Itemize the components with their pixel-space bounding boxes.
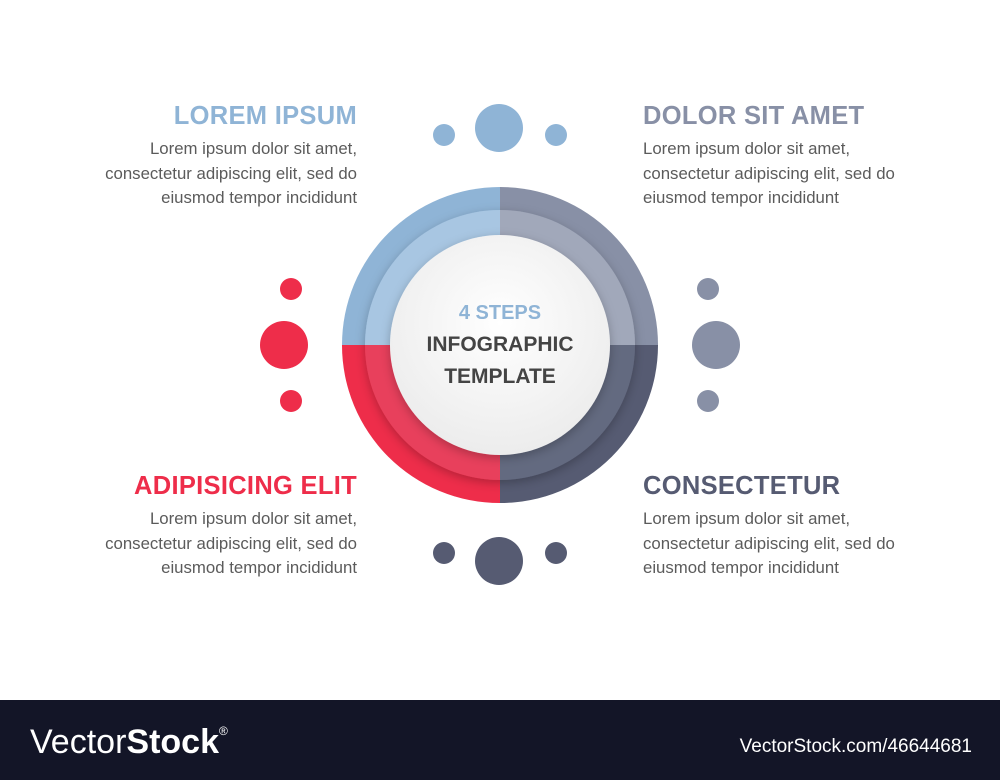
text block: consectetur: eiusmod tempor incididunt <box>643 558 839 577</box>
text block: dolor sit amet: consectetur adipiscing elit, sed do <box>643 164 895 182</box>
footer bar <box>0 700 1000 780</box>
text block: consectetur: Lorem ipsum dolor sit amet, <box>643 509 850 528</box>
text block: adipisicing elit <box>105 472 357 577</box>
text block: lorem ipsum: eiusmod tempor incididunt <box>161 188 357 207</box>
footer bar: VectorStock <box>30 723 219 761</box>
footer bar: VectorStock.com/46644681 <box>740 736 972 757</box>
ring chart <box>342 187 658 503</box>
text block: dolor sit amet: DOLOR SIT AMET <box>643 102 864 130</box>
text block: lorem ipsum: LOREM IPSUM <box>174 102 357 130</box>
center text: 4 STEPS <box>459 302 541 324</box>
footer bar: ® <box>219 724 228 738</box>
text block: adipisicing elit: Lorem ipsum dolor sit amet, <box>150 509 357 528</box>
text block: lorem ipsum <box>105 102 357 207</box>
dots: left <box>260 278 308 412</box>
text block: consectetur: consectetur adipiscing elit, sed do <box>643 534 895 552</box>
text block: consectetur <box>643 472 895 577</box>
text block: lorem ipsum: consectetur adipiscing elit, sed do <box>105 164 357 182</box>
text block: consectetur: CONSECTETUR <box>643 472 840 500</box>
center text <box>426 302 574 388</box>
center text: TEMPLATE <box>444 365 556 388</box>
dots: bottom <box>433 537 567 585</box>
text block: dolor sit amet <box>643 102 895 207</box>
center text: INFOGRAPHIC <box>426 333 574 356</box>
text block: adipisicing elit: consectetur adipiscing elit, sed do <box>105 534 357 552</box>
dots: top <box>433 104 567 152</box>
text block: adipisicing elit: eiusmod tempor incididunt <box>161 558 357 577</box>
text block: lorem ipsum: Lorem ipsum dolor sit amet, <box>150 139 357 158</box>
text block: dolor sit amet: eiusmod tempor incididunt <box>643 188 839 207</box>
text block: adipisicing elit: ADIPISICING ELIT <box>134 472 357 500</box>
text block: dolor sit amet: Lorem ipsum dolor sit amet, <box>643 139 850 158</box>
dots: right <box>692 278 740 412</box>
